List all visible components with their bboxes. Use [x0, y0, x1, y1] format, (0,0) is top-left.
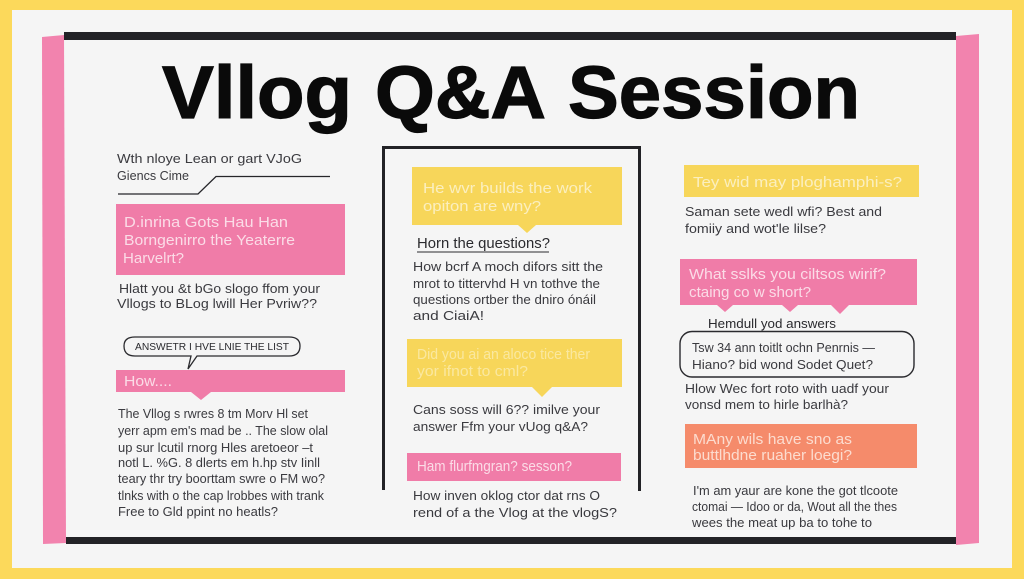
outlined answer box — [680, 332, 914, 377]
closing paragraph: I'm am yaur are kone the got tlcoote — [693, 483, 898, 498]
yellow question box two: Did you ai an aloco tice ther — [417, 347, 590, 363]
title — [162, 51, 860, 134]
right answer text: fomiiy and wot'le lilse? — [685, 221, 826, 236]
panel: left column — [116, 151, 345, 519]
center answer text: Cans soss will 6?? imilve your — [413, 402, 601, 417]
pink question box: Harvelrt? — [123, 251, 184, 267]
pink question box with three pointers: What sslks you ciltsos wirif? — [689, 267, 886, 283]
title: Session — [568, 51, 860, 134]
center closing text: How inven oklog ctor dat rns O — [413, 488, 600, 503]
answer text: Hlatt you &t bGo slogo ffom your — [119, 281, 321, 296]
yellow question box one — [412, 167, 622, 233]
follow-up text: Hlow Wec fort roto with uadf your — [685, 381, 890, 396]
follow-up text — [685, 381, 890, 412]
top black bar — [64, 32, 956, 40]
center closing text — [413, 488, 617, 520]
intro text with connector line: Wth nloye Lean or gart VJoG — [117, 151, 302, 166]
intro text with connector line: Giencs Cime — [117, 168, 189, 183]
pink question box with three pointers — [680, 259, 917, 314]
answer text: Vllogs to BLog lwill Her Pvriw?? — [117, 296, 317, 311]
paragraph: Free to Gld ppint no heatls? — [118, 504, 278, 519]
intro text with connector line — [117, 151, 330, 194]
paragraph: tlnks with o the cap lrobbes with trank — [118, 488, 325, 503]
pink question box: Borngenirro the Yeaterre — [124, 233, 295, 249]
paragraph — [118, 406, 328, 519]
paragraph: teary thr try boorttam swre o FM wo? — [118, 471, 325, 486]
orange question box — [685, 424, 917, 468]
orange question box: buttlhdne ruaher loegi? — [693, 448, 852, 464]
center paragraph: How bcrf A moch difors sitt the — [413, 259, 603, 274]
follow-up text: vonsd mem to hirle barlhà? — [685, 397, 848, 412]
right answer text — [685, 204, 882, 236]
closing paragraph: ctomai — Idoo or da, Wout all the thes — [692, 499, 897, 514]
bottom black bar — [66, 537, 956, 544]
pink question box — [116, 204, 345, 275]
title: Vllog — [162, 51, 352, 134]
speech bubble: ANSWETR I HVE LNIE THE LIST — [135, 341, 290, 353]
center paragraph: mrot to tittervhd H vn tothve the — [413, 276, 600, 291]
center paragraph: questions ortber the dniro ónáil — [413, 292, 596, 307]
closing paragraph: wees the meat up ba to tohe to — [691, 515, 872, 530]
pink question box: D.inrina Gots Hau Han — [124, 215, 288, 231]
pink session bar — [407, 453, 621, 481]
pink question box with three pointers: ctaing co w short? — [689, 285, 811, 301]
center answer text: answer Ffm your vUog q&A? — [413, 419, 588, 434]
answer text — [117, 281, 321, 311]
yellow heading box — [684, 165, 919, 197]
center paragraph: and CiaiA! — [413, 308, 484, 323]
panel: center column — [384, 148, 640, 520]
outlined answer box: Tsw 34 ann toitlt ochn Penrnis — — [692, 340, 875, 355]
center paragraph — [413, 259, 603, 323]
orange question box: MAny wils have sno as — [693, 432, 852, 448]
yellow heading box: Tey wid may ploghamphi-s? — [693, 175, 902, 191]
outlined answer box: Hiano? bid wond Sodet Quet? — [692, 357, 873, 372]
yellow question box one: opiton are wny? — [423, 199, 541, 215]
panel: right column — [680, 165, 919, 530]
title: Q&A — [375, 51, 546, 134]
paragraph: up sur lcutil rnorg Hles aretoeor –t — [118, 440, 313, 455]
speech bubble — [124, 337, 300, 369]
yellow question box one: He wvr builds the work — [423, 181, 593, 197]
closing paragraph — [691, 483, 898, 530]
pink bar with pointer — [116, 370, 345, 400]
paragraph: The Vllog s rwres 8 tm Morv Hl set — [118, 406, 308, 421]
paragraph: yerr apm em's mad be .. The slow olal — [118, 423, 328, 438]
center closing text: rend of a the Vlog at the vlogS? — [413, 505, 617, 520]
right answer text: Saman sete wedl wfi? Best and — [685, 204, 882, 219]
yellow question box two — [407, 339, 622, 397]
center answer text — [413, 402, 601, 434]
center frame — [384, 148, 640, 491]
paragraph: notl L. %G. 8 dlerts em h.hp stv Iinll — [118, 455, 320, 470]
pink session bar: Ham flurfmgran? sesson? — [417, 459, 572, 475]
underlined subheading: Horn the questions? — [417, 236, 550, 252]
right pink side band — [956, 34, 979, 545]
pink bar with pointer: How.... — [124, 374, 172, 390]
yellow question box two: yor ifnot to cml? — [417, 364, 528, 380]
left pink side band — [42, 35, 66, 544]
answers subheading: Hemdull yod answers — [708, 316, 836, 331]
